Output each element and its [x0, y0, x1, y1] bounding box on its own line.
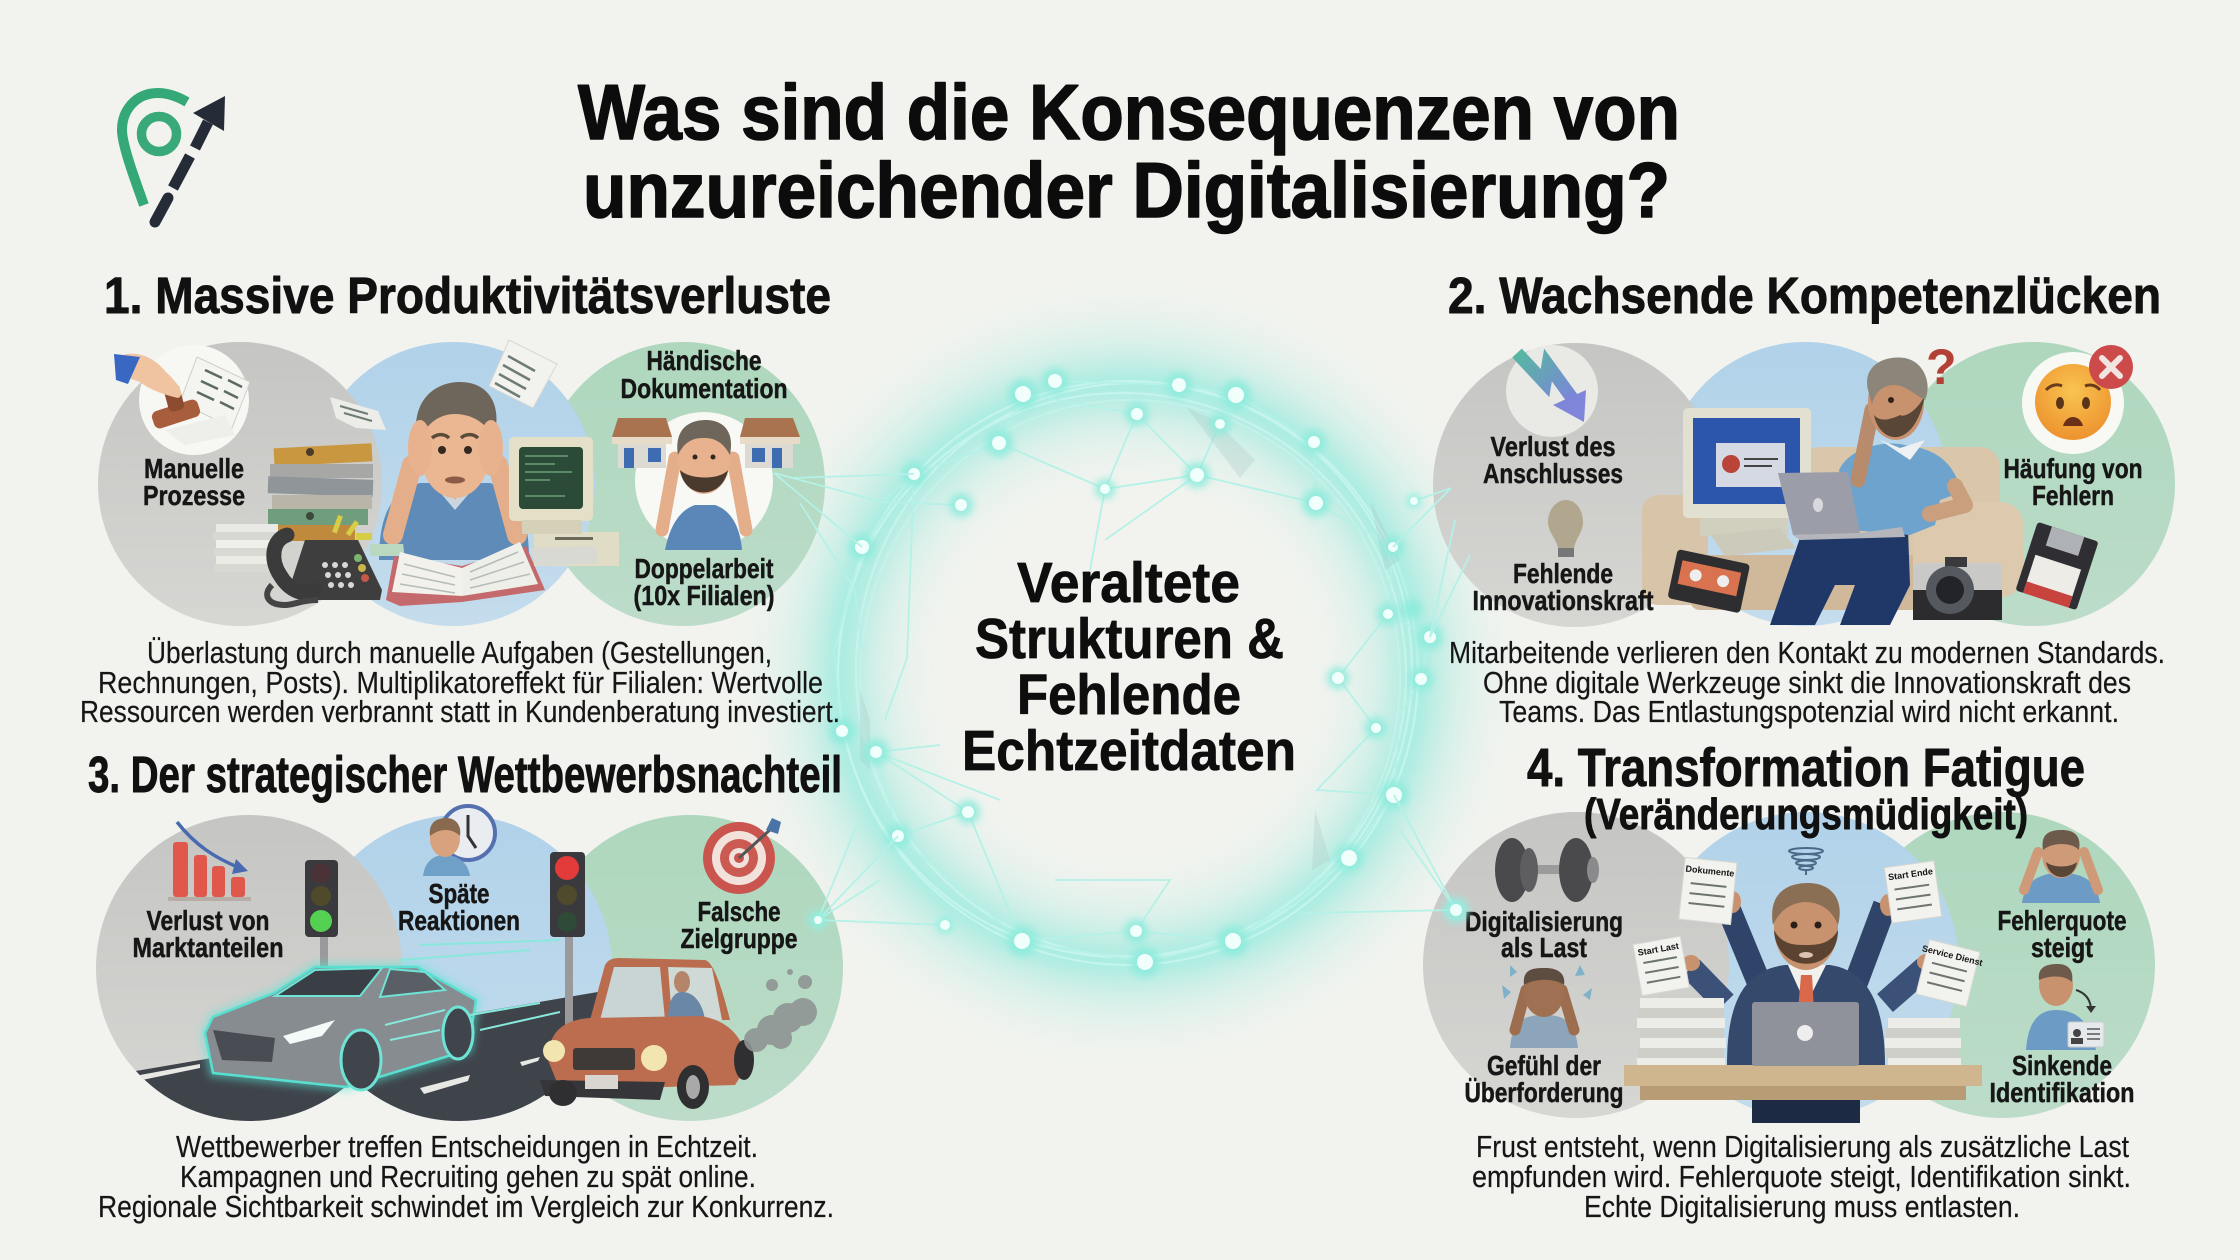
label: Digitalisierung als Last: als Last	[1501, 932, 1587, 963]
icon: target with arrow	[703, 818, 781, 894]
panel 4: Transformation Fatigue	[1423, 738, 2155, 1224]
illustration: stressed man	[379, 382, 529, 560]
illustration: paper stacks	[1637, 998, 1961, 1068]
icon: exhaust smoke	[744, 969, 817, 1052]
label: Fehlerquote steigt	[1998, 905, 2126, 963]
icon: small stressed man	[662, 420, 746, 550]
label: Manuelle Prozesse	[143, 453, 245, 511]
heading 1: 1. Massive Produktivitätsverluste	[104, 267, 831, 324]
icon: binders	[268, 443, 373, 541]
central text	[962, 551, 1296, 783]
label: Fehlerquote steigt: steigt	[2031, 932, 2093, 963]
body text 1: Überlastung durch manuelle Aufgaben (Gestellungen,	[147, 635, 772, 670]
label: Verlust des Anschlusses: Verlust des	[1490, 431, 1616, 462]
panel 3: Der strategischer Wettbewerbsnachteil	[88, 746, 843, 1224]
icon: green traffic light	[305, 860, 338, 967]
body text 4: Frust entsteht, wenn Digitalisierung als zusätzliche Last	[1476, 1129, 2129, 1164]
title: Was sind die Konsequenzen von	[578, 68, 1680, 156]
icon: old computer	[509, 437, 619, 566]
title: unzureichender Digitalisierung?	[583, 146, 1670, 234]
illustration: man with four arms at desk	[1682, 883, 1935, 1123]
heading 2: 2. Wachsende Kompetenzlücken	[1448, 267, 2161, 324]
icon: documents held up: Start Ende	[1888, 866, 1933, 882]
label: Häufung von Fehlern: Fehlern	[2032, 480, 2114, 511]
body text 4: Echte Digitalisierung muss entlasten.	[1584, 1189, 2020, 1224]
label: Gefühl der Überforderung: Gefühl der	[1487, 1050, 1601, 1081]
icon: floppy disk	[2015, 522, 2099, 610]
label: Häufung von Fehlern: Häufung von	[2004, 453, 2142, 484]
icon: tornado of stress	[1789, 848, 1823, 875]
heading 4: (Veränderungsmüdigkeit)	[1584, 790, 2028, 839]
icon: shops	[612, 418, 800, 468]
label: Sinkende Identifikation: Identifikation	[1990, 1077, 2134, 1108]
central text: Strukturen &	[975, 607, 1284, 671]
label: Fehlende Innovationskraft	[1472, 558, 1654, 616]
label: Späte Reaktionen: Späte	[428, 878, 490, 909]
icon: documents held up: Start Last	[1637, 941, 1680, 958]
body text 3: Wettbewerber treffen Entscheidungen in Echtzeit.	[176, 1129, 758, 1164]
panel 1: Massive Produktivitätsverluste	[80, 267, 840, 729]
illustration: glowing modern car	[205, 940, 560, 1090]
label: Falsche Zielgruppe: Falsche	[698, 896, 780, 927]
venn circles 2	[1433, 342, 2175, 627]
label: Häufung von Fehlern	[2004, 453, 2142, 511]
venn circles 4	[1423, 812, 2155, 1118]
label: Digitalisierung als Last	[1465, 906, 1623, 963]
label: Händische Dokumentation	[620, 345, 788, 404]
logo: location pin with arrow	[122, 93, 225, 222]
label: Doppelarbeit: (10x Filialen)	[634, 580, 774, 611]
label: Doppelarbeit	[634, 553, 774, 611]
label: Fehlende Innovationskraft: Innovationskraft	[1472, 585, 1654, 616]
body text 4: empfunden wird. Fehlerquote steigt, Identifikation sinkt.	[1472, 1159, 2131, 1194]
icon: documents held up	[1633, 857, 1985, 1008]
connector lines from hub to panels	[774, 473, 1470, 933]
icon: paper stack	[213, 524, 278, 572]
body text 2	[1449, 635, 2165, 729]
central text: Veraltete	[1017, 551, 1240, 615]
icon: camera	[1913, 557, 2002, 620]
icon: cassette	[1667, 549, 1750, 613]
venn circles 3	[96, 815, 843, 1121]
icon: documents held up: Dokumente	[1685, 864, 1735, 879]
label: Digitalisierung als Last: Digitalisierung	[1465, 906, 1623, 937]
icon: stamp and documents	[114, 354, 250, 445]
title	[578, 68, 1680, 234]
icon: worried emoji with x badge	[2035, 345, 2133, 440]
label: Verlust von Marktanteilen: Marktanteilen	[132, 932, 284, 963]
body text 2: Teams. Das Entlastungspotenzial wird nicht erkannt.	[1499, 694, 2119, 729]
icon: dumbbell	[1495, 838, 1599, 902]
icon: documents held up: Service Dienst	[1921, 943, 1984, 968]
label: Verlust von Marktanteilen	[132, 905, 284, 963]
label: Falsche Zielgruppe: Zielgruppe	[680, 923, 798, 954]
label: Fehlende Innovationskraft: Fehlende	[1513, 558, 1613, 589]
label: Händische Dokumentation: Händische	[646, 345, 762, 376]
label: Späte Reaktionen	[398, 878, 520, 936]
label: Manuelle Prozesse: Manuelle	[144, 453, 244, 484]
body text 1: Ressourcen werden verbrannt statt in Kundenberatung investiert.	[80, 694, 840, 729]
body text 3	[98, 1129, 834, 1224]
icon: floating papers	[330, 340, 557, 430]
label: Späte Reaktionen: Reaktionen	[398, 905, 520, 936]
icon: light bulb	[1548, 500, 1583, 557]
heading 4: 4. Transformation Fatigue	[1527, 738, 2085, 798]
body text 1	[80, 635, 840, 729]
illustration: old computer with error dialog	[1683, 408, 1811, 556]
label: Sinkende Identifikation: Sinkende	[2012, 1050, 2112, 1081]
icon: person with id card	[2026, 964, 2104, 1050]
illustration: desk with laptop	[1624, 1002, 1982, 1100]
panel 2: Wachsende Kompetenzlücken	[1433, 267, 2175, 729]
label: Fehlerquote steigt: Fehlerquote	[1998, 905, 2126, 936]
icon: red traffic light	[550, 852, 585, 1025]
body text 2: Ohne digitale Werkzeuge sinkt die Innovationskraft des	[1483, 665, 2131, 700]
label: Sinkende Identifikation	[1990, 1050, 2134, 1108]
icon: falling arrow	[1517, 353, 1586, 422]
icon: open book	[386, 542, 545, 606]
icon: person covering ears	[2022, 830, 2100, 903]
illustration: man on sofa with laptop	[1770, 357, 1965, 625]
label: Verlust des Anschlusses: Anschlusses	[1483, 458, 1623, 489]
body text 3: Regionale Sichtbarkeit schwindet im Vergleich zur Konkurrenz.	[98, 1189, 834, 1224]
illustration: old orange car with driver	[540, 958, 754, 1109]
label: Doppelarbeit: Doppelarbeit	[634, 553, 774, 584]
heading 4	[1527, 738, 2085, 839]
icon: question mark: ?	[1926, 339, 1957, 395]
central text: Fehlende	[1017, 663, 1241, 727]
icon: telephone	[267, 535, 404, 605]
label: Gefühl der Überforderung	[1464, 1050, 1624, 1108]
label: Verlust von Marktanteilen: Verlust von	[146, 905, 270, 936]
label: Gefühl der Überforderung: Überforderung	[1464, 1077, 1624, 1108]
venn circles 1	[98, 342, 825, 626]
label: Manuelle Prozesse: Prozesse	[143, 480, 245, 511]
icon: bar chart with falling arrow	[168, 822, 251, 901]
illustration: sofa	[1642, 447, 2023, 610]
label: Händische Dokumentation: Dokumentation	[620, 373, 788, 404]
central hub: glowing network ring	[829, 368, 1443, 977]
body text 1: Rechnungen, Posts). Multiplikatoreffekt für Filialen: Wertvolle	[98, 665, 823, 700]
illustration: road	[136, 992, 598, 1121]
heading 3: 3. Der strategischer Wettbewerbsnachteil	[88, 746, 842, 803]
label: Verlust des Anschlusses	[1483, 431, 1623, 489]
label: Falsche Zielgruppe	[680, 896, 798, 954]
icon: overwhelmed person	[1502, 965, 1592, 1048]
body text 3: Kampagnen und Recruiting gehen zu spät online.	[180, 1159, 756, 1194]
icon: person with clock	[423, 806, 495, 876]
central text: Echtzeitdaten	[962, 719, 1296, 783]
body text 4	[1472, 1129, 2131, 1224]
